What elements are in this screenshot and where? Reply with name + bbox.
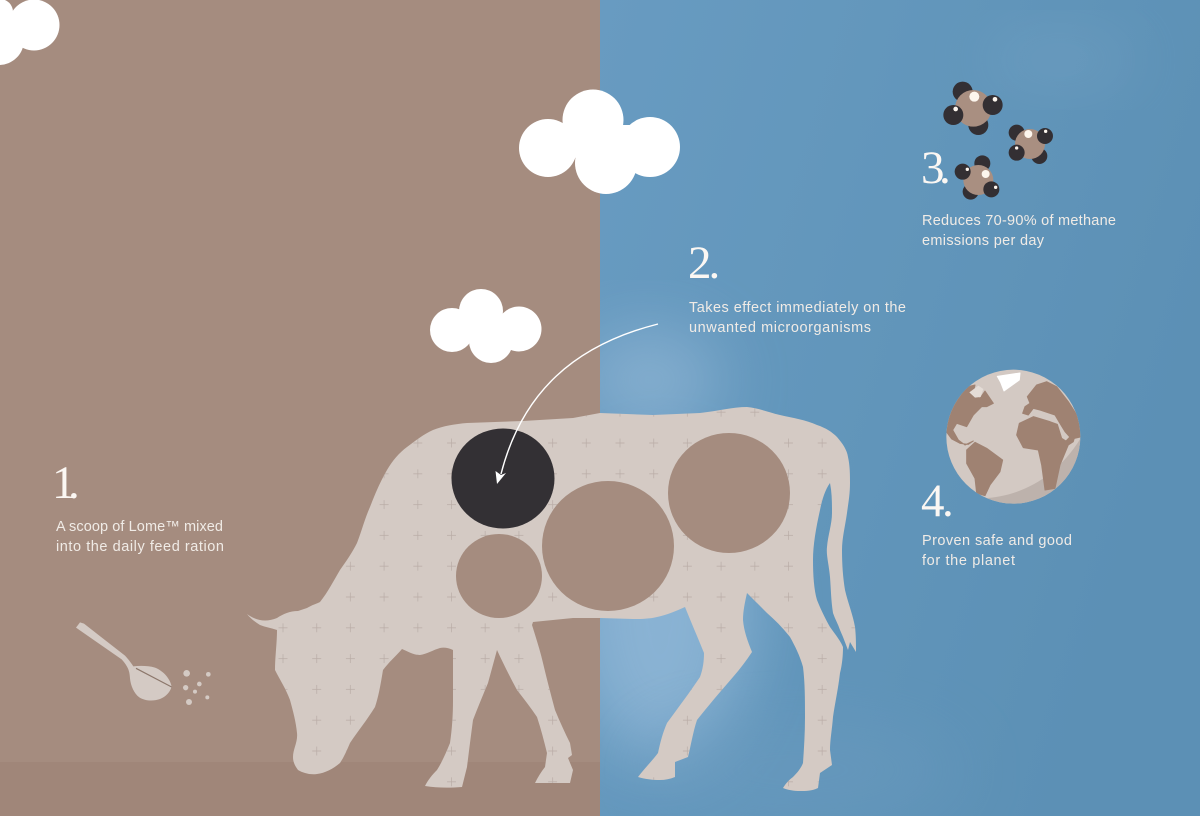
- icon: methane molecules: [943, 82, 1053, 200]
- icon: spoon with powder: [76, 622, 211, 705]
- step 2 description: unwanted microorganisms: [689, 320, 871, 336]
- cloud: top left: [0, 0, 60, 65]
- number 3: 3.: [921, 142, 951, 194]
- step 3 description: emissions per day: [922, 233, 1045, 249]
- step 2: [688, 237, 906, 336]
- stomach chamber: small: [456, 534, 542, 618]
- cloud: small above cow: [430, 289, 542, 363]
- step 1: [52, 457, 224, 555]
- step 3: [921, 142, 1116, 249]
- step 2 description: Takes effect immediately on the: [689, 300, 906, 316]
- step 1 description: into the daily feed ration: [56, 539, 224, 555]
- eurasia: [1023, 382, 1083, 439]
- stomach chamber: middle: [542, 481, 674, 611]
- south america: [967, 442, 1003, 496]
- number 2: 2.: [688, 237, 720, 289]
- cow silhouette with organs: [240, 400, 860, 800]
- africa: [1017, 417, 1077, 490]
- greenland ice: [997, 373, 1020, 391]
- step 4: [921, 475, 1072, 569]
- ground strip: [0, 762, 600, 816]
- number 1: 1.: [52, 457, 80, 509]
- cow body: [247, 407, 856, 791]
- step 4 description: for the planet: [922, 553, 1015, 569]
- stomach chamber: rear: [668, 433, 790, 553]
- cloud: large centre: [519, 90, 680, 194]
- cross-hatch pattern on cow: [278, 408, 856, 786]
- background: blue sky right panel: [570, 0, 1200, 816]
- step 3 description: Reduces 70-90% of methane: [922, 213, 1116, 229]
- number 4: 4.: [921, 475, 954, 527]
- icon: globe: [945, 370, 1083, 508]
- globe shading: [986, 439, 1080, 504]
- molecule 1: [943, 82, 1003, 135]
- step 1 description: A scoop of Lome™ mixed: [56, 519, 223, 535]
- arrow: from step 2 to stomach: [496, 324, 658, 484]
- stomach chamber: dark rumen target: [452, 428, 554, 528]
- molecule 2: [1009, 125, 1053, 164]
- small ice patches: [969, 386, 983, 398]
- background: brown left panel: [0, 0, 600, 816]
- molecule 3: [955, 155, 999, 200]
- step 4 description: Proven safe and good: [922, 533, 1072, 549]
- north america: [945, 385, 993, 445]
